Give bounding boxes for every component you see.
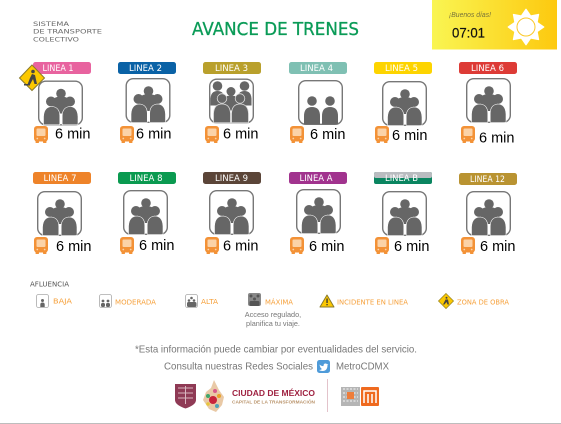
panel: Línea 3 [203, 62, 261, 143]
logo: floral emblem [203, 380, 224, 412]
bus icon [34, 126, 48, 143]
panel: Línea 2 [118, 62, 176, 143]
bus icon [461, 126, 475, 143]
occupancy icon [467, 79, 510, 122]
line label: LINEA 1 [42, 64, 74, 74]
wait time: 6 min [55, 126, 90, 142]
occupancy icon [383, 192, 426, 235]
legend: incidente en línea: INCIDENTE EN LINEA [337, 298, 408, 306]
legend: máxima: MÁXIMA [265, 298, 293, 306]
legend: incidente en línea [320, 295, 408, 307]
wait time: 6 min [309, 239, 344, 255]
bus icon [34, 237, 48, 254]
occupancy icon [467, 192, 510, 235]
social media line [164, 360, 389, 373]
bus icon [205, 126, 219, 143]
logo text [232, 388, 316, 404]
line label: LINEA 12 [470, 175, 505, 185]
line label: LINEA 4 [300, 64, 333, 74]
header logo text [33, 21, 102, 44]
social media line: Consulta nuestras Redes Sociales [164, 362, 313, 372]
legend heading: AFLUENCIA [30, 280, 69, 288]
bus icon [120, 126, 134, 143]
wait time: 6 min [480, 239, 515, 255]
occupancy icon [126, 79, 170, 122]
legend: moderada: MODERADA [115, 298, 156, 306]
legend: máxima: planifica tu viaje. [246, 319, 300, 328]
legend: baja: BAJA [53, 298, 72, 306]
panel: Línea 1 [20, 62, 91, 143]
bus icon [205, 237, 219, 254]
line label: LINEA 6 [471, 64, 504, 74]
line label: LINEA 5 [385, 64, 418, 74]
bus icon [290, 126, 304, 143]
wait time: 6 min [310, 127, 345, 143]
panel: Línea A [289, 172, 347, 255]
wait time: 6 min [392, 128, 427, 144]
social media line: MetroCDMX [336, 362, 389, 372]
panel: greeting and time [432, 0, 557, 50]
occupancy icon [297, 190, 340, 233]
legend: zona de obra [438, 294, 509, 308]
title: AVANCE DE TRENES [192, 20, 359, 40]
occupancy icon [124, 191, 167, 234]
wait time: 6 min [56, 239, 91, 255]
occupancy icon [299, 81, 342, 124]
logo text: CIUDAD DE MÉXICO [232, 388, 316, 398]
legend: alta [186, 294, 218, 308]
legend: alta: ALTA [201, 298, 218, 306]
wait time: 6 min [479, 130, 514, 146]
header logo text: SISTEMA [33, 21, 70, 28]
panel: Línea 8 [118, 172, 176, 254]
bus icon [375, 126, 389, 143]
occupancy icon [210, 79, 253, 123]
footer logos [175, 379, 379, 412]
panel: Línea 5 [374, 62, 432, 144]
legend: moderada [100, 294, 156, 308]
panel: Línea 6 [459, 62, 517, 146]
line label: LINEA 3 [215, 64, 248, 74]
logo text: CAPITAL DE LA TRANSFORMACIÓN [232, 400, 315, 404]
line label: LINEA B [385, 174, 418, 184]
legend: baja [36, 294, 72, 308]
line label: LINEA 2 [129, 64, 162, 74]
icon: works sign [20, 65, 44, 90]
occupancy icon [39, 81, 82, 125]
wait time: 6 min [136, 126, 171, 142]
panel: greeting and time: 07:01 [452, 24, 485, 40]
disclaimer: *Esta información puede cambiar por eventualidades del servicio. [135, 344, 417, 356]
bus icon [290, 237, 304, 254]
panel: greeting and time: ¡Buenos días! [449, 12, 491, 19]
icon: twitter [317, 360, 330, 373]
bus icon [461, 237, 475, 254]
line label: LINEA 8 [130, 174, 162, 184]
legend: zona de obra: ZONA DE OBRA [457, 298, 509, 306]
legend: máxima [245, 293, 301, 328]
header logo text: COLECTIVO [33, 36, 79, 44]
occupancy icon [383, 82, 426, 125]
occupancy icon [38, 192, 81, 235]
bus icon [375, 237, 389, 254]
occupancy icon [210, 191, 253, 234]
legend: máxima: Acceso regulado, [245, 310, 301, 319]
logo: Metro [361, 387, 379, 406]
wait time: 6 min [139, 238, 174, 254]
bus icon [120, 237, 134, 254]
line label: LINEA A [300, 174, 333, 184]
panel: Línea 7 [33, 172, 91, 255]
legend [30, 280, 509, 328]
logo: QR code [341, 387, 360, 406]
wait time: 6 min [223, 126, 258, 142]
panel: Línea 9 [203, 172, 261, 254]
header logo text: DE TRANSPORTE [33, 28, 102, 36]
logo: crest [175, 384, 196, 408]
icon: sun [508, 9, 544, 45]
panel: Línea 4 [289, 62, 347, 143]
wait time: 6 min [394, 239, 429, 255]
panel: Línea B [374, 172, 432, 255]
panel: Línea 12 [459, 173, 517, 255]
wait time: 6 min [223, 238, 258, 254]
line label: LINEA 9 [215, 174, 248, 184]
line label: LINEA 7 [44, 174, 76, 184]
